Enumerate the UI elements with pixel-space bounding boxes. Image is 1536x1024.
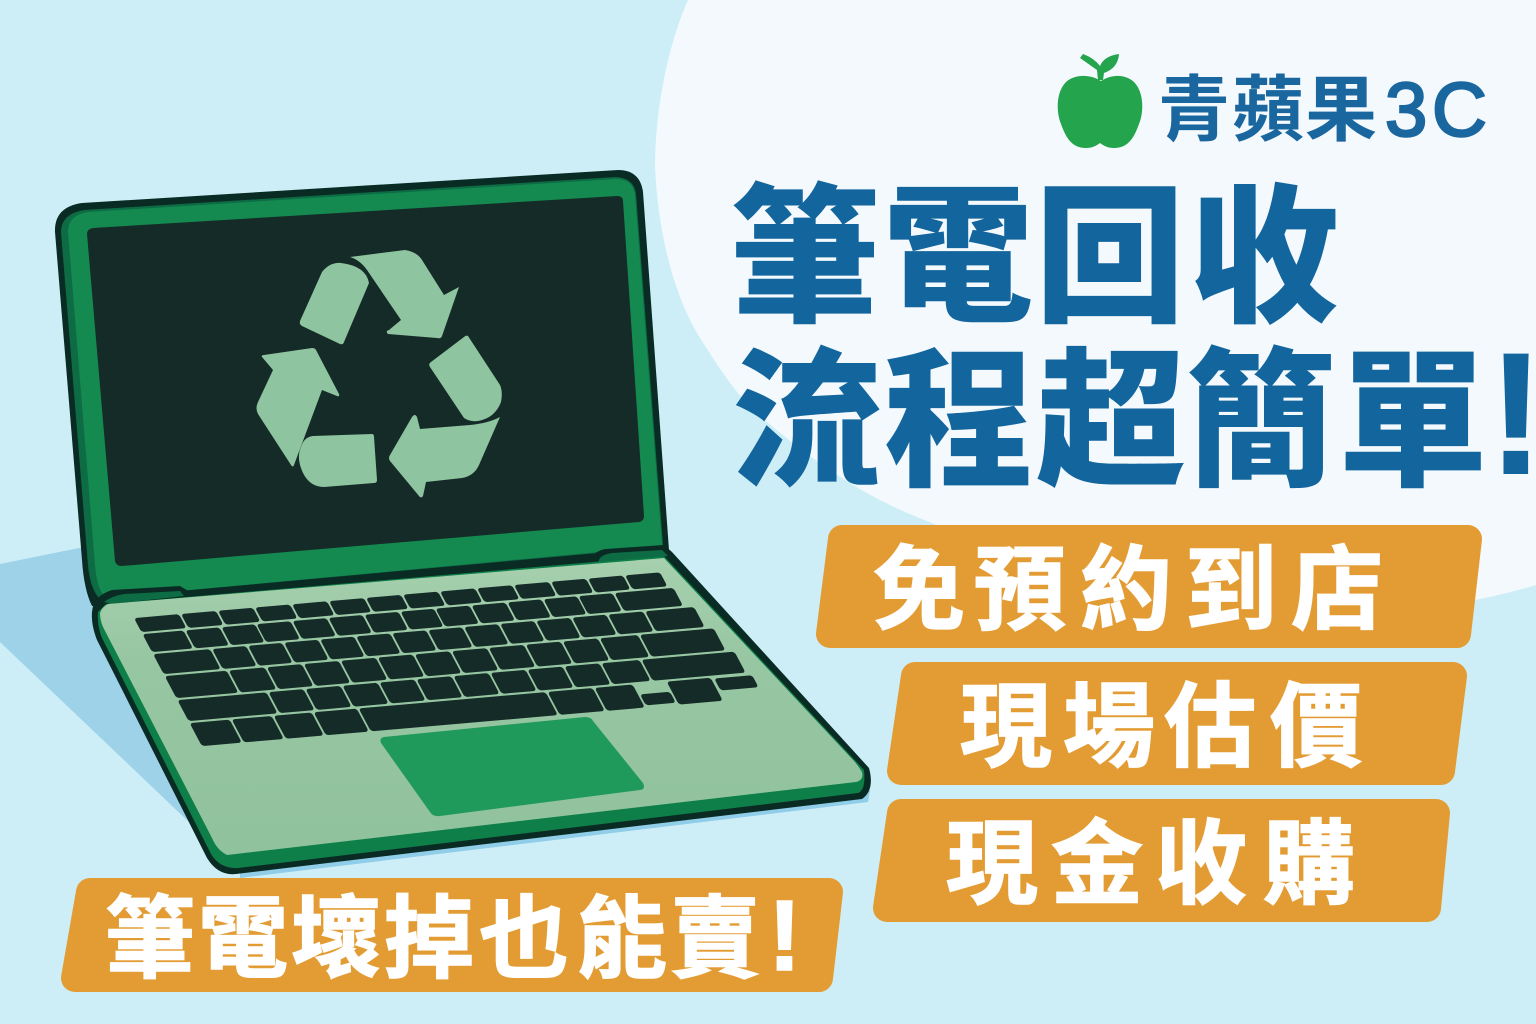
brand suffix 3C: 3C <box>1385 68 1487 153</box>
laptop lid <box>55 170 669 606</box>
white background blob <box>655 0 1536 614</box>
badge: walk-in: 免預約到店 <box>873 540 1383 642</box>
badge: broken laptops accepted: ! <box>768 880 801 992</box>
icon: green apple <box>1058 54 1142 148</box>
brand name: 青蘋果 <box>1158 71 1377 151</box>
laptop base shadow <box>240 790 870 878</box>
laptop base outline <box>92 545 871 874</box>
title line 1: 筆電回收 <box>730 174 1339 342</box>
laptop illustration <box>55 170 871 878</box>
title line 2: 流程超簡單 <box>732 338 1488 506</box>
laptop shadow <box>0 547 215 850</box>
trackpad <box>380 717 644 816</box>
logo <box>1058 54 1487 153</box>
badge: cash purchase: 現金收購 <box>946 814 1355 916</box>
badge: on-site valuation: 現場估價 <box>960 677 1362 779</box>
screen <box>87 196 644 566</box>
badge: broken laptops accepted: 筆電壞掉也能賣 <box>105 890 760 990</box>
keyboard deck <box>100 558 862 855</box>
hinge right <box>598 550 668 562</box>
icon: recycling symbol <box>256 250 502 498</box>
hinge left <box>104 591 184 604</box>
keyboard keys <box>134 569 764 746</box>
laptop base side <box>98 556 864 868</box>
